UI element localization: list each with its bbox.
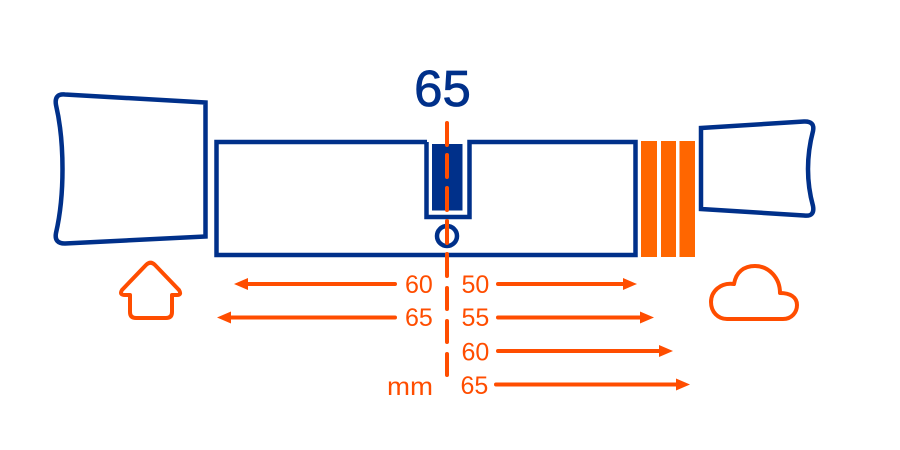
cylinder body	[216, 142, 636, 255]
label: right 55: 55	[462, 304, 489, 332]
cam pin circle	[437, 226, 457, 246]
right thumb knob	[701, 121, 813, 216]
label: right 60: 60	[462, 338, 489, 366]
title: 65: 65	[414, 60, 471, 117]
right arrow 60	[498, 345, 673, 357]
label: left 65: 65	[405, 304, 433, 332]
icon: cloud	[711, 266, 797, 319]
left thumb knob	[56, 94, 206, 244]
orange extension bars	[641, 141, 695, 257]
left arrow 65	[217, 312, 395, 324]
left arrow 60	[234, 278, 395, 290]
right arrow 65	[496, 378, 690, 390]
label: right 50: 50	[462, 271, 489, 299]
right arrow 50	[498, 278, 637, 290]
cam block	[432, 144, 462, 210]
label: mm: mm	[387, 373, 433, 401]
right arrow 55	[498, 312, 654, 324]
size labels	[387, 271, 489, 401]
label: left 60: 60	[405, 271, 433, 299]
icon: house	[121, 263, 180, 318]
label: right 65: 65	[460, 372, 488, 400]
center dashed line	[445, 123, 449, 375]
